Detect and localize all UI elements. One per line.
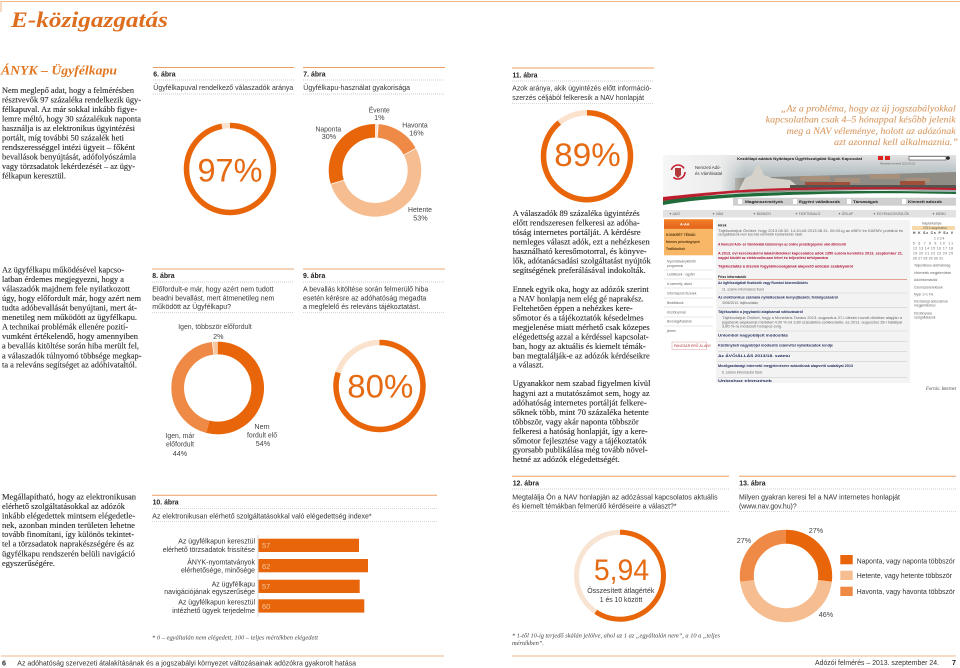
text block: megállapítás: tovább finomítani, így különös tekintet- [2,529,134,539]
panel: 7. ábra [303,68,445,222]
news column: A 2013. évi kereskedelmi lakáshitelekkel kapcsolatos adók 1350 euróra kerekítés 2013. szeptember 21. [718,252,903,256]
news column: Közlönybeli nagyobbjel módosító számvitel nyilatkozatok rendje [718,344,833,348]
text block: ÁNYK intro: Nem meglepő adat, hogy a felmérésben [2,85,135,95]
text block: megállapítás: Megállapítható, hogy az elektronikusan [2,492,137,502]
bar chart: 57 [262,541,270,550]
header banner: és Vámhivatal [695,171,722,176]
chart labels: Hetente [408,205,432,214]
left menu [664,219,713,350]
panel: 10. ábra [152,495,437,642]
news column: jegybanki alapkamat mértékét 4,00 %-ról 3,80 százalékra csökkentette, és 2013. augusztus 28-i hatállyal [721,320,902,324]
donut chart: 89% [544,113,630,200]
chart labels: előfordult [166,440,194,448]
value caption: Összesített átlagérték [587,586,655,595]
text block: válaszadók 89 százaléka: gyorsabb publikálása még tovább növel- [513,445,648,455]
text block: Ügyfélkapu működése: vumként értékelendő, hogy amennyiben [2,331,139,341]
footer: left page: 6 [2,658,6,668]
panel: 13. ábra: Milyen gyakran keresi fel a NAV internetes honlapját [739,492,900,502]
calendar and links: Adóinformációk [914,278,938,282]
text block: válaszadók 89 százaléka: Feltehetően éppen a nehézkes kere- [513,303,633,313]
panel: 9. ábra: A bevallás kitöltése során felmerülő hiba [303,284,428,294]
text block: ÁNYK intro: vagy törzsadatok lekérdezését – az ügy- [2,161,135,171]
website screenshot: NAV homepage [663,155,956,383]
text block: válaszadók 89 százaléka: megjelenése miatt mérhető csak közepes [513,322,650,332]
value caption [587,586,655,604]
panel: 11. ábra: Azok aránya, akik ügyintézés előtt információ- [512,84,652,92]
header banner [663,155,956,205]
footnote: * 1-től 10-ig terjedő skálán jelölve, ahol az 1 az „egyáltalán nem”, a 10 a „teljes [512,633,721,640]
panel: 8. ábra: Előfordult-e már, hogy azért nem tudott [152,284,274,294]
value: 5,94: 5,94 [594,554,649,587]
legend: Havonta, vagy havonta többször [857,587,956,596]
bar chart: elérhetősége, minősége [181,566,255,574]
panel: 11. ábra: 11. ábra [512,72,538,80]
menu bar: ✦ ŰRLAP [838,211,854,216]
text block: Ügyfélkapu működése: ta a releváns segítséget az adóhivataltól. [2,360,137,370]
text block: Ügyfélkapu működése [2,264,142,370]
text block: megállapítás: elérhető szolgáltatásokkal az adózók [2,501,126,511]
text block: ÁNYK intro: portált, míg további 50 százalék heti [2,133,125,143]
news column: Uniomból nagyobbjelt módosítás [718,333,788,337]
panel: 10. ábra: Az elektronikusan elérhető szolgáltatásokkal való elégedettség indexe* [152,512,372,520]
calendar and links: Nyár 1+1 Fix [914,292,934,296]
panel: 12. ábra: 12. ábra [513,480,539,488]
chart labels: 46% [819,610,834,619]
chart labels: Igen, többször előfordult [178,322,252,331]
news column: szolgáltatások nem lesznek elérhetők karbantartás miatt. [718,232,803,236]
panel: 13. ábra: (www.nav.gov.hu)? [739,502,797,510]
news column: 11. számú információs füzet [722,288,764,292]
news column: Az elektronikus számára nyilatkozások benyújtásáról, feldolgozásáról [718,296,838,300]
calendar and links: 26 27 28 29 30 31 [913,256,943,260]
chart labels: fordult elő [247,430,277,440]
text block: válaszadók 89 százaléka: előtt rendszeresen felkeresi az adóha- [513,218,640,228]
panel: 8. ábra: beadni bevallást, mert átmenetileg nem [152,294,274,302]
panel: 7. ábra: Ügyfélkapu-használat gyakorisága [303,83,410,92]
calendar and links: Naptárkártya [922,222,942,226]
text block: megállapítás [2,492,137,568]
panel: 11. ábra [512,68,654,200]
left menu: Beállítások [667,301,684,305]
text block: Ügyfélkapu működése: a válaszadók túlnyomó többsége megkap- [2,350,142,360]
bar chart: Az ügyfélkapu [212,580,255,588]
left menu: Nemes pénztárgépek [666,240,700,244]
pull quote: meg a NAV véleménye, holott az adózónak [787,126,956,137]
text block: válaszadók 89 százaléka: hetné az adózók elégedettségét. [513,454,620,464]
text block: ÁNYK intro: rendszerességgel intézi ügyeit – főként [2,142,136,152]
text block: ÁNYK intro: bevallások benyújtását, adófolyószámla [2,152,136,162]
text block: válaszadók 89 százaléka: ban megtalálják-e az adózók kérdéseikre [513,350,650,360]
calendar and links: Közösségi adószámok [914,300,948,304]
navigation buttons [733,198,956,206]
footer: left page [1,656,444,668]
chart labels: 27% [737,536,752,545]
calendar and links: H K Sz Cs P Sz V [913,231,954,235]
news column: napjai között az elektronikusan lehet és teljesítési árfolyamára [718,256,828,260]
value: 89%: 89% [554,137,621,173]
chart labels: 53% [413,214,428,222]
calendar and links: Üzemszünetelések [914,286,943,290]
left menu: programok [667,264,684,268]
calendar and links: 2013 augusztus [923,226,947,230]
text block: válaszadók 89 százaléka: felkeresi a hatóság honlapját, így a kere- [513,426,648,436]
news column: Az ügfélszolgálati fiszközök vagy Rumbol közreműködés [718,281,808,285]
bar chart: elérhető törzsadatok frissítése [163,545,255,554]
chart labels: Nem [254,422,270,431]
left menu: Trafikboltok [666,247,685,251]
chart labels: Naponta [315,124,341,134]
chart labels: 1% [374,113,385,122]
text block: megállapítás: inkább elégedettek mintsem elégedetle- [2,510,135,520]
navigation buttons: Egyéni vállalkozók [799,200,840,204]
news column: Mezőgazdasági internetű megjelenésére adózóknak alapvető szabályai 2013 [718,364,853,368]
text block: válaszadók 89 százaléka: a választ. [513,360,544,370]
news column: Tájékoztató a jegybanki alapkamat változásáról [718,310,803,314]
menu bar: ✦ EGYENLEGKÖZLŐK [873,211,910,216]
text block: válaszadók 89 százaléka: Ugyanakkor nem szabad figyelmen kívül [513,378,651,388]
panel: 8. ábra: működött az Ügyfélkapu? [152,302,231,311]
left menu: Közlöny/már [667,310,687,314]
menu bar: ✦ FIZETNIVALÓ [795,211,821,216]
bar chart: 60 [262,602,270,611]
footer: left page: Az adóhatóság szervezeti átalakításának és a jogszabályi környezet változásainak adózókra gyakorolt hatása [17,658,356,668]
text block: ÁNYK intro: lemre méltó, hogy 30 százalékuk naponta [2,114,141,124]
bar chart: Az ügyfélkapun keresztül [178,598,255,606]
panel: 13. ábra: 13. ábra [739,480,766,488]
panel: 10. ábra: 10. ábra [153,500,179,506]
header banner: Nemzeti Adó- [695,165,721,170]
footer: right page [512,656,956,667]
donut chart: 97% [186,126,274,212]
donut chart: occurrence [178,348,258,428]
news column: Friss információk [718,275,746,279]
text block: Ügyfélkapu működése: Az ügyfélkapu működésével kapcso- [2,264,124,274]
donut chart: usage frequency [336,131,414,210]
text block: válaszadók 89 százaléka: elégedettség azzal a kérdéssel kapcsolat- [513,331,649,341]
text block: megállapítás: tel a törzsadatok naprakészségére és az [2,539,134,549]
pull quote: azt azonnal kell alkalmaznia.” [834,137,958,148]
text block: válaszadók 89 százaléka: a NAV honlapja nem elég gé naprakész. [513,293,644,303]
calendar and links: szolgáltatások [914,316,936,320]
chart labels: 16% [409,128,424,138]
bar chart: ÁNYK-nyomtatványok [187,558,255,566]
panel: 8. ábra: 8. ábra [152,273,175,280]
panel: 6. ábra: 6. ábra [153,72,176,78]
chart labels [315,106,432,222]
header banner: Részletes keresés 2013.09.25. [880,162,916,166]
left menu: Információs füzetek [667,292,697,296]
text block: válaszadók 89 százaléka: sőmotor és a tájékoztatók késedelmes [513,312,644,322]
donut chart: 80% [336,342,423,430]
text block: válaszadók 89 százaléka: használható keresőmotorral, és könyve- [513,246,647,256]
donut chart: 5,94 [576,532,664,619]
news column: Hírek [718,224,727,228]
bar chart: intézhető ügyek terjedelme [172,606,255,615]
text block: válaszadók 89 százaléka: nemleges választ adók, ezt a nehézkesen [513,237,650,247]
left menu: KONKRÉT TÉMÁK [666,232,696,237]
text block: Ügyfélkapu működése: latban érdemes megjegyezni, hogy a [2,274,124,284]
news column: Tájékoztatjuk Önöket, hogy 2013.08.30. 14:10-től 2013.08.31. 06:00-ig az eBEV és KAEMV portálok és [718,229,903,233]
chart labels: 54% [256,439,271,448]
bar chart [163,535,368,617]
menu bar: ✦ MENÜ [932,212,946,216]
chart labels: 44% [173,449,188,458]
text block: válaszadók 89 százaléka: sőknek több, mint 70 százaléka hetente [513,407,649,417]
legend: Naponta, vagy naponta többször [857,556,956,566]
text block: válaszadók 89 százaléka: adóhatóság internetes portálját felkere- [513,398,647,408]
navigation buttons: Társaságok [853,200,878,204]
news column: 6. számú információs füzet [722,370,762,374]
text block: megállapítás: egyszerűségére. [2,558,55,568]
text block: Ügyfélkapu működése: A technikai problémák ellenére pozití- [2,322,128,332]
text block: válaszadók 89 százaléka [513,208,651,464]
news column [716,220,910,383]
chart labels: 2% [213,332,224,341]
panel: 12. ábra: Megtalálja Ön a NAV honlapján az adózással kapcsolatos aktuális [512,492,718,502]
footnote: mértékben”. [512,640,544,647]
left menu: A-AA [680,222,690,226]
chart labels [166,322,277,458]
footnote [512,633,721,647]
news column: 4006/2013. tájékoztatás [722,301,758,305]
chart labels [737,526,834,619]
text block: ÁNYK intro: félkapun keresztül. [2,170,66,180]
left menu: Letöltések - ügyfél [667,272,695,276]
left menu: Nyomtatványkitöltő [667,260,696,264]
navigation buttons: Kiemelt adózók [908,200,942,204]
title: E-közigazgatás [10,7,168,32]
pull quote: kapcsolatban csak 4–5 hónappal később jelenik [766,115,956,126]
donut chart: visit frequency [747,537,825,615]
text block: Ügyfélkapu működése: válaszadók majdnem fele nyilatkozott [2,284,131,294]
text block: Ügyfélkapu működése: úgy, hogy előfordult már, hogy azért nem [2,293,141,303]
text block: ÁNYK intro [0,63,141,180]
value: 80%: 80% [347,368,413,404]
panel: 13. ábra [737,476,956,619]
panel: 12. ábra: és kiemelt témákban felmerülő kérdéseire a választ?* [512,502,677,510]
left menu: PANCSÁR ERŐ ÁL ANY [674,343,712,348]
text block: válaszadók 89 százaléka: lők, adótanácsadási szolgáltatást nyújtók [513,256,651,266]
footer: right page: 7 [952,658,956,667]
panel: 11. ábra: szerzés céljából felkeresik a NAV honlapját [512,93,644,102]
panel: 6. ábra [153,68,294,212]
news column: Tájékoztatjuk Önöket, hogy a Monetáris Tanács 2013. augusztus 27-i ülésén hozott döntése alapján a [722,316,902,320]
legend: Hetente, vagy hetente többször [857,571,953,580]
news column: Az ÁVÖ/ÁLLÁS 2013/18. számú [718,353,790,358]
bar chart: navigációjának egyszerűsége [164,587,255,596]
text block: megállapítás: ügyfélkapu rendszerén belüli navigáció [2,548,136,558]
chart labels: 30% [322,132,337,141]
pull quote: „Az a probléma, hogy az új jogszabályokkal [781,104,956,115]
text block: válaszadók 89 százaléka: sőmotor fejlesztése vagy a tájékoztatók [513,435,647,445]
chart labels: Havonta [402,120,428,130]
text block: válaszadók 89 százaléka: többször, vagy akár naponta többször [513,416,639,426]
text block: Ügyfélkapu működése: tudta adóbevallását benyújtani, mert át- [2,302,137,312]
calendar and links: 5 6 7 8 9 10 11 [913,242,953,246]
calendar and links: megjelöléshez [914,304,936,308]
text block: válaszadók 89 százaléka: hagyni azt a mutatószámot sem, hogy az [513,388,650,398]
calendar and links: 19 20 21 22 23 24 25 [913,252,953,256]
news column: Unioshoz elemzések [718,379,772,383]
left menu: A személy, akció [667,282,692,286]
news column: A Nemzeti Adó- és Vámhivatal közleménye az online pénztárgépekre való áttérésről [718,242,846,246]
news column: Tájékoztatás a dízelek fogyatékosságának alapvető adózási szabályairól [718,264,853,268]
panel: 9. ábra [303,269,445,430]
text block: válaszadók 89 százaléka: segítségének preferálásával indokolták. [513,265,646,275]
menu bar: ✦ VÁM [712,212,723,216]
header banner: Kezdőlapi adatok Nyitólapra Ügyfélszolgálat Súgók Kapcsolat [737,156,863,161]
panel: 8. ábra [152,269,294,458]
news column: 3,80 %-ra módosult hónapos évig. [722,325,782,329]
calendar and links: 12 13 14 15 16 17 18 [913,246,953,250]
section heading: ÁNYK – Ügyfélkapu [0,63,117,78]
panel: 7. ábra: 7. ábra [303,72,326,78]
navigation buttons: Magánszemélyek [745,200,783,204]
calendar and links: 1 2 3 4 [934,236,944,240]
left menu: jelzés [666,329,676,333]
title [1,2,960,32]
calendar and links: Hírlevelek megjelenítése [914,271,951,275]
text block: válaszadók 89 százaléka: Ennek egyik oka, hogy az adózók szerint [513,284,649,294]
value caption: 1 és 10 között [600,595,642,604]
logo [671,165,685,179]
bar chart: 57 [262,582,270,591]
pull quote [766,104,958,148]
panel: 9. ábra: a megfelelő és releváns tájékoztatást. [303,302,420,311]
bar chart: Az ügyfélkapun keresztül [178,536,255,546]
text block: megállapítás: nek, azonban minden területen lehetne [2,520,135,530]
calendar and links: Teljesítéses adóhatóság [914,264,950,268]
text block: ÁNYK intro: használja is az elektronikus ügyintézési [2,123,136,133]
text block: válaszadók 89 százaléka: tóság internetes portálját. A kérdésre [513,227,641,237]
panel: 12. ábra [512,476,729,647]
calendar and links: Közlöny/ára [914,312,932,316]
chart labels: Igen, már [166,431,195,440]
footnote: * 0 – egyáltalán nem elégedett, 100 – teljes mértékben elégedett [152,634,318,642]
chart labels: 27% [809,526,824,535]
calendar and links [912,222,955,320]
panel: 6. ábra: Ügyfélkapuval rendelkező válaszadók aránya [153,83,293,92]
value: 97%: 97% [198,152,262,188]
text block: ÁNYK intro: félkapuval. Az már sokkal inkább figye- [2,104,137,114]
menu bar [663,210,956,218]
menu bar: ✦ BÜNÜGY [753,212,772,216]
text block: Ügyfélkapu működése: menetileg nem működött az ügyfélkapu. [2,312,137,322]
text block: válaszadók 89 százaléka: ban, hogy az aktuális és kiemelt témák- [513,341,646,351]
panel: 9. ábra: esetén kérésre az adóhatóság megadta [303,294,426,302]
text block: válaszadók 89 százaléka: A válaszadók 89 százaléka ügyintézés [513,208,640,218]
left menu: Bírósági/határok [667,320,692,324]
footer: right page: Adózói felmérés – 2013. szeptember 24. [815,658,939,667]
text block: ÁNYK intro: résztvevők 97 százaléka rendelkezik ügy- [2,94,141,104]
menu bar: ✦ ADÓ [669,211,680,216]
text block: Ügyfélkapu működése: a bevallás kitöltése során hiba merült fel, [2,341,139,351]
bar chart: 62 [262,562,270,571]
panel: 9. ábra: 9. ábra [303,273,325,280]
chart labels: Évente [369,106,390,114]
legend [840,555,956,596]
